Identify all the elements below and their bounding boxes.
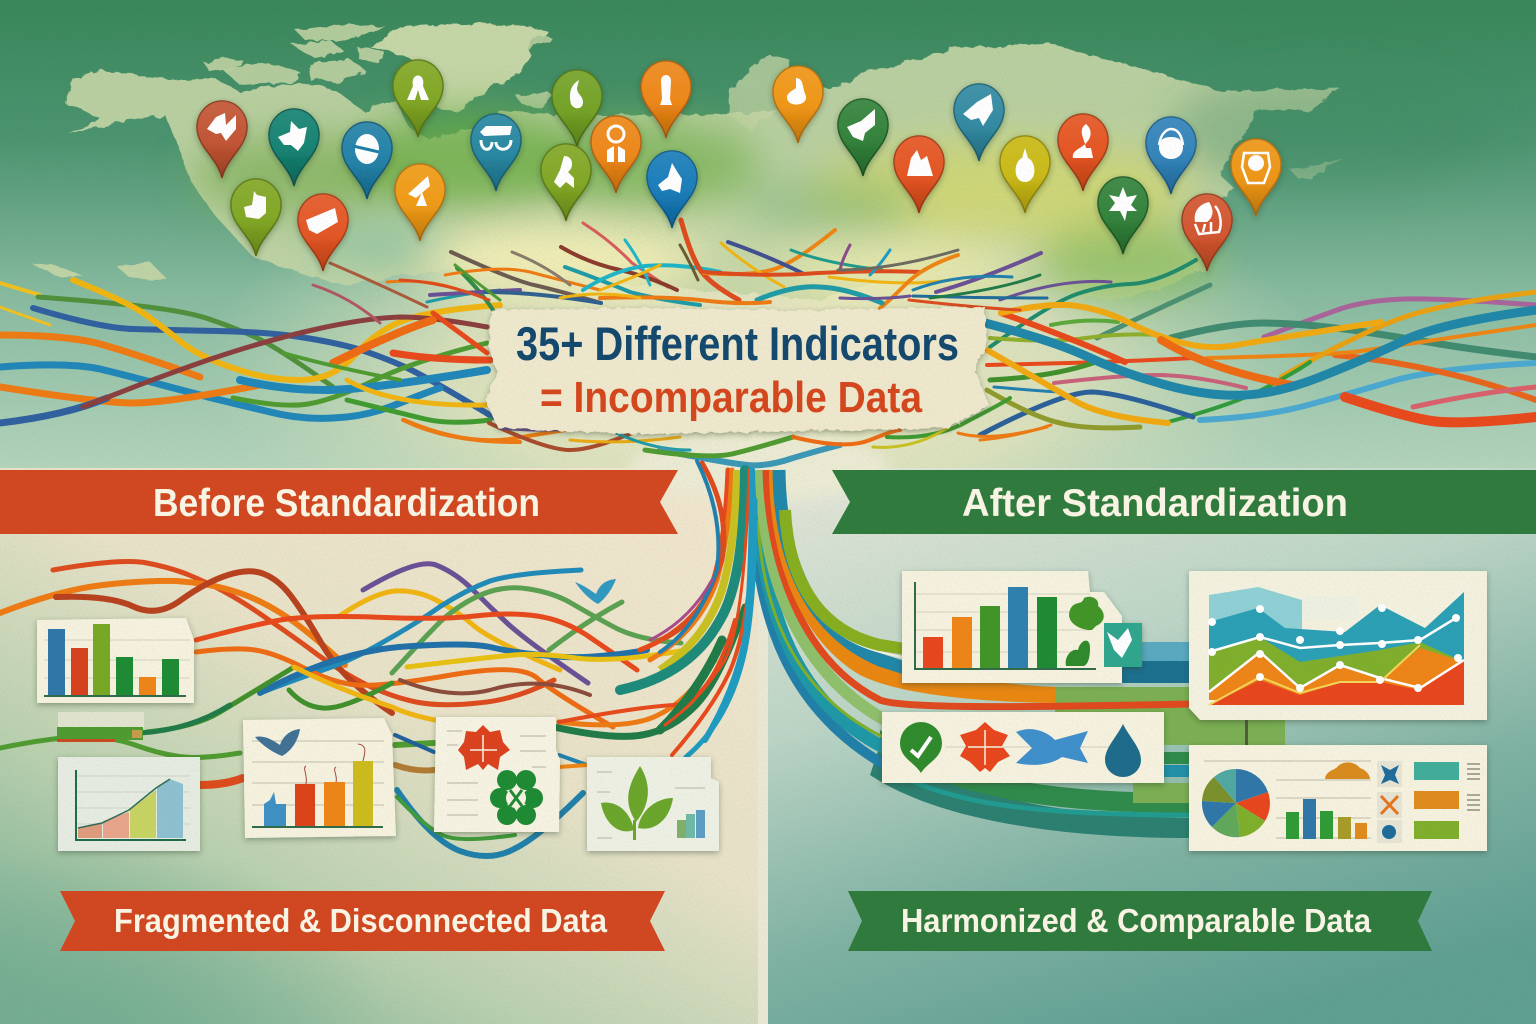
pin 23: [1182, 194, 1232, 271]
banner: Fragmented & Disconnected Data: Fragmented & Disconnected Data: [114, 902, 608, 939]
banner: Harmonized & Comparable Data: [848, 891, 1432, 951]
icon: blue fish: [1016, 729, 1088, 765]
card: icons row: [882, 712, 1164, 783]
ribbons: top tangle: [400, 220, 1047, 310]
banner: Fragmented & Disconnected Data: [60, 891, 665, 951]
pin 3: [342, 122, 392, 199]
location pins: [197, 60, 1281, 271]
card: bar chart with leaves: [902, 571, 1142, 683]
card: leaf: [587, 757, 719, 851]
world map: [30, 24, 1490, 300]
pin 1: [197, 101, 247, 178]
pin 13: [647, 151, 697, 228]
pin 16: [894, 136, 944, 213]
icon: red flower: [458, 725, 510, 770]
label line 1: 35+ Different Indicators: [516, 317, 959, 370]
pin 19: [1058, 114, 1108, 191]
banner: After Standardization: After Standardization: [962, 482, 1348, 525]
pin 14: [773, 66, 823, 143]
pin 7: [395, 164, 445, 241]
panel: after charts: [882, 571, 1487, 851]
icon: green pencil marker: [57, 712, 144, 742]
icon: small blue bird: [575, 579, 616, 604]
icon: water drop: [1105, 724, 1141, 777]
pin 2: [269, 109, 319, 186]
icon: green flower: [490, 770, 543, 825]
ribbons: fragmented tangle in before panel: [0, 461, 755, 856]
ribbons: right tangle: [980, 260, 1536, 440]
pin 22: [1231, 139, 1281, 216]
card: area chart: [1189, 571, 1487, 720]
pin 20: [1146, 117, 1196, 194]
banner: Before Standardization: [0, 470, 678, 534]
pin 12: [541, 144, 591, 221]
banner: Before Standardization: Before Standardization: [153, 482, 540, 525]
map: land masses: [30, 24, 1345, 300]
pin 17: [954, 84, 1004, 161]
pin 6: [298, 194, 348, 271]
card: dashboard: [1189, 745, 1487, 851]
right panel data flow bands: [753, 470, 1285, 838]
pin 18: [1000, 136, 1050, 213]
pie chart: [1202, 769, 1270, 837]
label: 35+ Different Indicators = Incomparable Data: [486, 307, 989, 434]
icon: leaves: [601, 766, 673, 840]
card: flowers: [434, 717, 560, 832]
ribbons: under the label: [404, 398, 1047, 465]
pin 10: [641, 61, 691, 138]
card: bar chart: [37, 618, 194, 703]
card: area chart: [58, 757, 200, 851]
pin 4: [393, 60, 443, 137]
icon: check pin: [900, 722, 942, 773]
banner: After Standardization: [832, 470, 1536, 534]
pin 9: [552, 70, 602, 147]
panel: before charts: [37, 618, 719, 851]
pin 21: [1098, 177, 1148, 254]
ribbons: left tangle: [0, 263, 520, 442]
pin 15: [838, 99, 888, 176]
banner: Harmonized & Comparable Data: Harmonized & Comparable Data: [901, 902, 1372, 939]
pin 8: [471, 114, 521, 191]
pin 5: [231, 179, 281, 256]
pin 11: [591, 116, 641, 193]
card: mixed chart: [243, 718, 396, 838]
label parchment: [486, 307, 989, 434]
map: colour wash: [190, 70, 1490, 300]
label line 2: = Incomparable Data: [540, 373, 922, 422]
icon: red flower: [960, 722, 1010, 772]
